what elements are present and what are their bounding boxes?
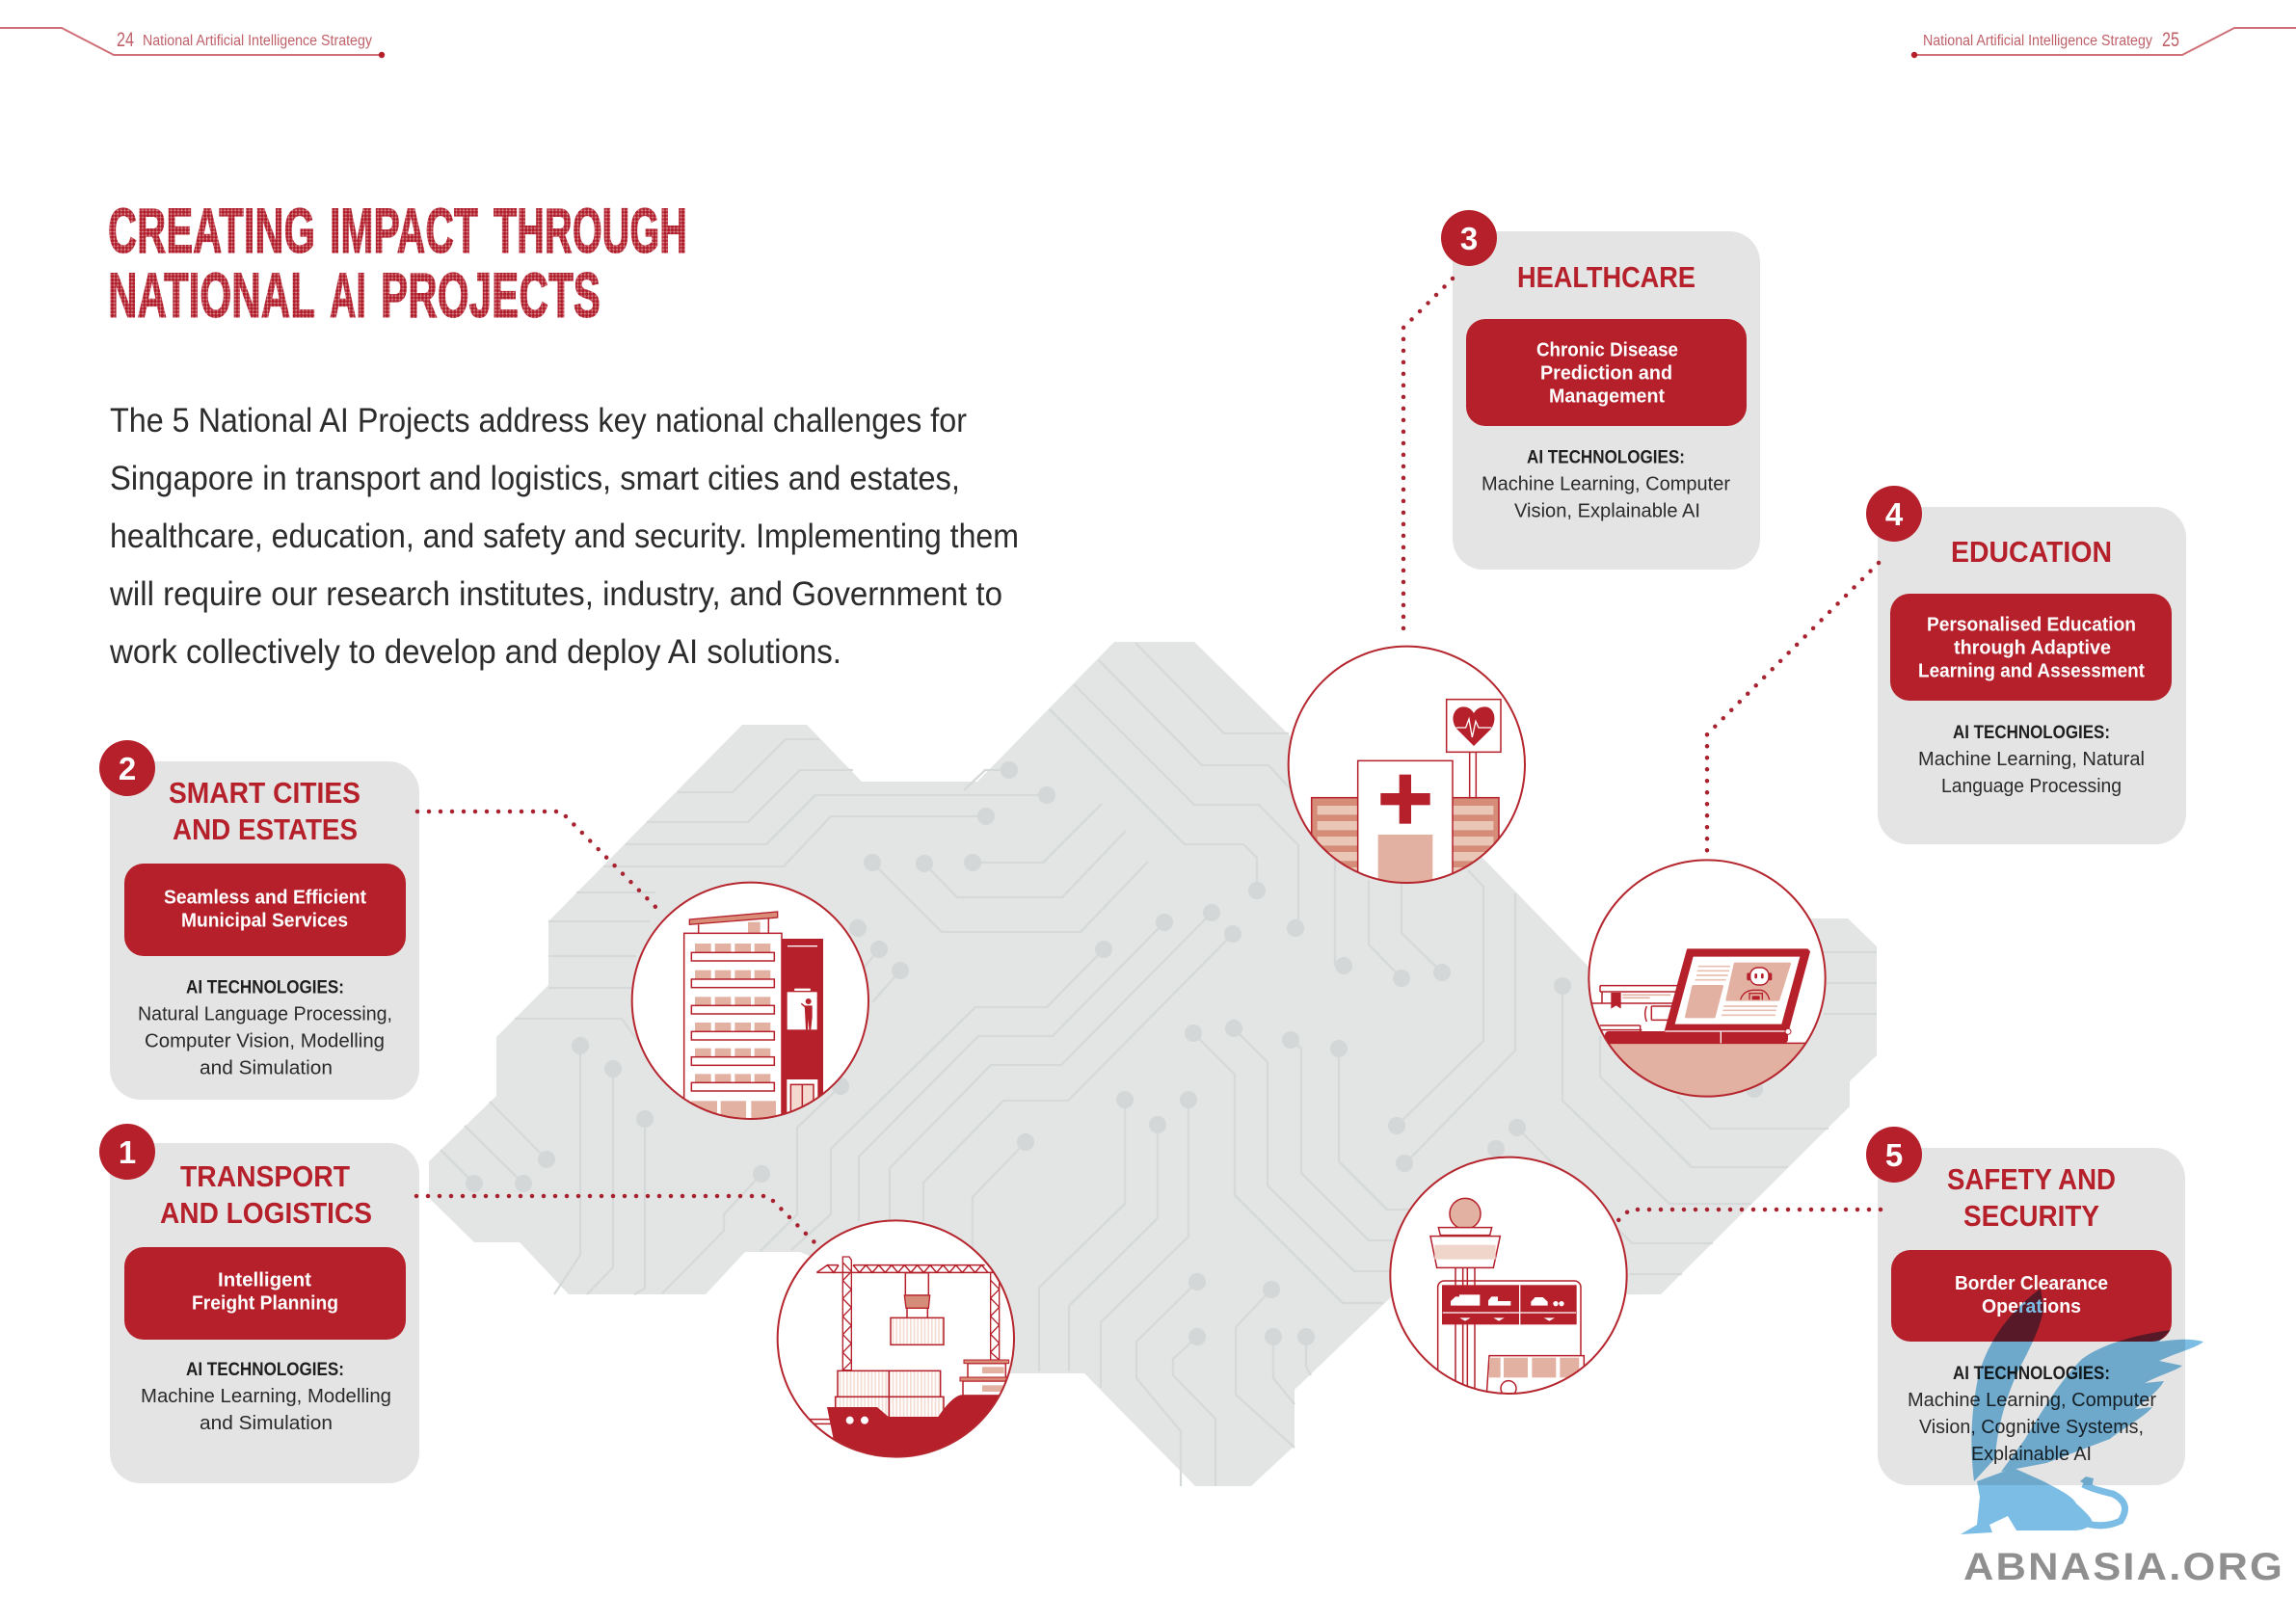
intro paragraph: The 5 National AI Projects address key national challenges for [110, 402, 967, 439]
AI technologies: transport: and Simulation [200, 1413, 333, 1434]
project box: freight planning: Intelligent [218, 1270, 311, 1291]
watermark text: ABNASIA.ORG [1963, 1546, 2284, 1588]
connector: education [1707, 563, 1879, 852]
project box: chronic disease: Management [1549, 386, 1665, 407]
badge 4 [1866, 486, 1922, 542]
panel: smart cities [99, 740, 419, 1100]
page header left [0, 28, 385, 58]
badge 2: 2 [119, 751, 136, 786]
heading: transport: AND LOGISTICS [160, 1196, 372, 1230]
project box: freight planning: Freight Planning [192, 1293, 338, 1315]
page header left: 24 [117, 29, 134, 51]
intro paragraph: Singapore in transport and logistics, smart cities and estates, [110, 460, 960, 497]
project box: personalised education: Learning and Assessment [1918, 661, 2145, 682]
project box: personalised education [1890, 594, 2172, 701]
illustration: border checkpoint tower [1390, 1157, 1627, 1409]
page header left: National Artificial Intelligence Strategy [143, 33, 372, 49]
heading: education: EDUCATION [1951, 535, 2112, 569]
heading: transport [160, 1159, 372, 1230]
AI technologies: education: AI TECHNOLOGIES: [1953, 723, 2110, 743]
project box: border clearance: Operations [1982, 1296, 2081, 1317]
badge 3: 3 [1460, 221, 1478, 256]
page header right: National Artificial Intelligence Strategy [1923, 33, 2152, 49]
project box: freight planning [124, 1247, 406, 1340]
heading: transport: TRANSPORT [180, 1159, 350, 1193]
project box: chronic disease: Prediction and [1540, 362, 1672, 384]
AI technologies: transport [141, 1360, 391, 1434]
AI technologies: smart cities: Natural Language Processing, [138, 1004, 392, 1025]
AI technologies: safety [1908, 1364, 2156, 1465]
AI technologies: education: Machine Learning, Natural [1918, 749, 2145, 770]
heading: safety: SECURITY [1963, 1199, 2099, 1233]
watermark: griffin [1961, 1289, 2203, 1534]
title: THROUGH [494, 195, 687, 266]
title [108, 195, 687, 331]
panel: education [1866, 486, 2186, 844]
badge 2 [99, 740, 155, 796]
badge 4: 4 [1885, 496, 1904, 532]
illustration: laptop and books [1588, 859, 1827, 1098]
connector: healthcare [1403, 279, 1453, 638]
title: IMPACT [330, 195, 478, 266]
project box: border clearance [1891, 1250, 2172, 1342]
AI technologies: education [1918, 723, 2145, 797]
illustration: port crane and ship [778, 1220, 1014, 1465]
project box: municipal services: Seamless and Efficient [164, 887, 366, 908]
intro paragraph: work collectively to develop and deploy AI solutions. [109, 633, 841, 671]
title: PROJECTS [381, 259, 601, 331]
AI technologies: transport: AI TECHNOLOGIES: [186, 1360, 344, 1380]
project box: chronic disease [1466, 319, 1747, 426]
AI technologies: safety: Vision, Cognitive Systems, [1919, 1417, 2144, 1438]
title: NATIONAL [108, 259, 315, 331]
badge 5 [1866, 1127, 1922, 1183]
panel: transport [99, 1124, 419, 1483]
heading: smart cities [169, 776, 360, 846]
AI technologies: safety: Explainable AI [1971, 1444, 2092, 1465]
project box: personalised education: through Adaptive [1954, 638, 2111, 659]
badge 3 [1441, 210, 1497, 266]
AI technologies: healthcare: Vision, Explainable AI [1514, 501, 1700, 522]
AI technologies: transport: Machine Learning, Modelling [141, 1386, 391, 1407]
AI technologies: smart cities [138, 977, 392, 1079]
AI technologies: smart cities: Computer Vision, Modelling [145, 1031, 385, 1052]
page header right: 25 [2162, 29, 2179, 51]
badge 5: 5 [1885, 1137, 1903, 1173]
AI technologies: healthcare: AI TECHNOLOGIES: [1527, 447, 1685, 468]
project box: border clearance: Border Clearance [1955, 1273, 2108, 1294]
intro paragraph: will require our research institutes, industry, and Government to [109, 575, 1002, 613]
AI technologies: healthcare [1482, 447, 1730, 522]
project box: personalised education: Personalised Education [1927, 615, 2136, 636]
project box: chronic disease: Chronic Disease [1536, 339, 1678, 360]
Singapore circuit map [429, 642, 1877, 1486]
AI technologies: safety: AI TECHNOLOGIES: [1953, 1364, 2110, 1384]
title: CREATING [108, 195, 315, 266]
connector: smart cities [417, 812, 659, 911]
intro paragraph [109, 402, 1019, 671]
connector: safety [1616, 1210, 1881, 1222]
AI technologies: safety: Machine Learning, Computer [1908, 1390, 2156, 1411]
heading: safety: SAFETY AND [1947, 1162, 2116, 1196]
badge 1: 1 [119, 1134, 136, 1170]
panel: safety [1866, 1127, 2185, 1485]
project box: municipal services: Municipal Services [181, 910, 348, 931]
AI technologies: smart cities: AI TECHNOLOGIES: [186, 977, 344, 998]
heading: smart cities: SMART CITIES [169, 776, 360, 810]
heading: safety [1947, 1162, 2116, 1233]
project box: municipal services [124, 864, 406, 956]
AI technologies: healthcare: Machine Learning, Computer [1482, 474, 1730, 495]
AI technologies: smart cities: and Simulation [200, 1058, 333, 1079]
badge 1 [99, 1124, 155, 1180]
title: AI [330, 259, 366, 331]
heading: healthcare: HEALTHCARE [1517, 260, 1695, 294]
intro paragraph: healthcare, education, and safety and security. Implementing them [110, 518, 1019, 555]
illustration: smart city building [632, 883, 868, 1129]
AI technologies: education: Language Processing [1941, 776, 2122, 797]
heading: smart cities: AND ESTATES [173, 812, 358, 846]
panel: healthcare [1441, 210, 1760, 570]
connector: transport [416, 1196, 814, 1242]
illustration: hospital [1289, 647, 1525, 899]
page header right [1911, 28, 2296, 58]
